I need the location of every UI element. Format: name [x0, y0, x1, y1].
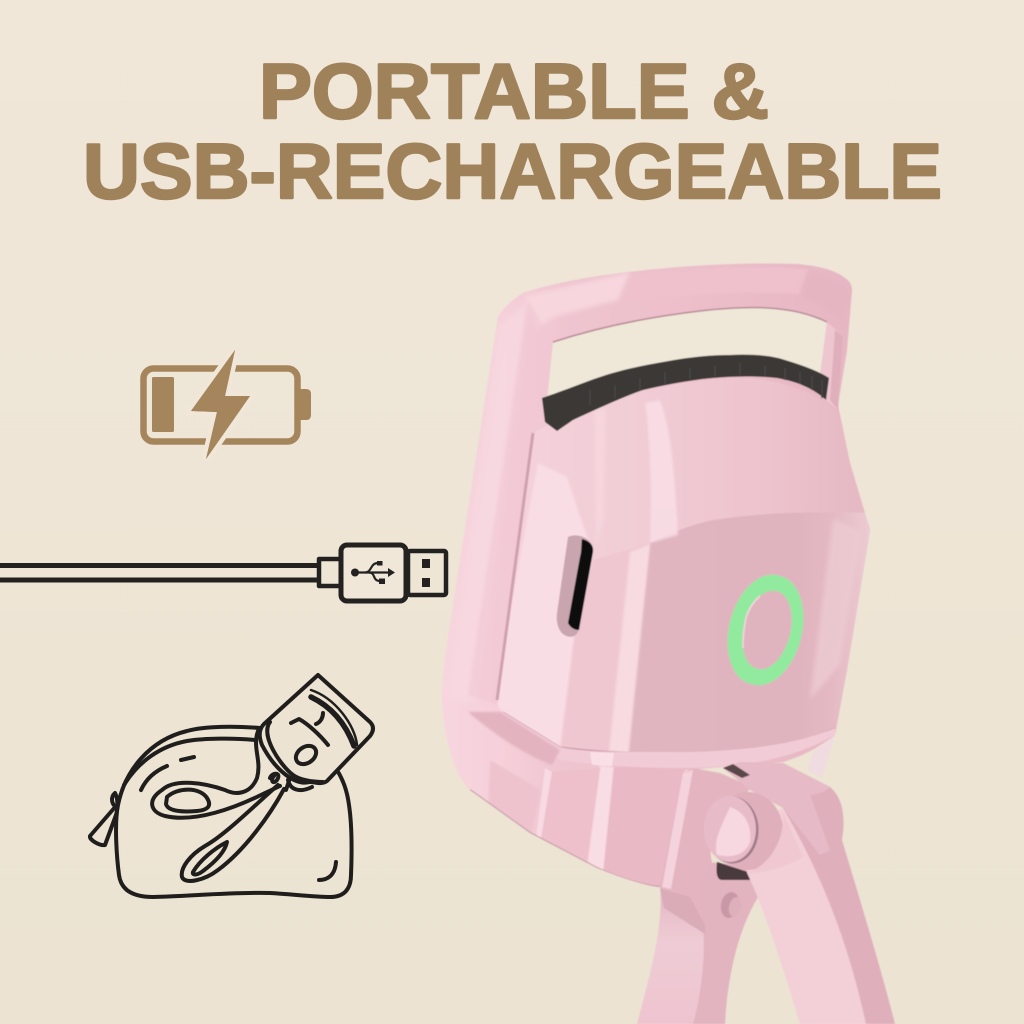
- body left groove: [497, 433, 533, 700]
- curler upper handle: [182, 785, 284, 881]
- bag zipper line: [124, 739, 255, 785]
- zipper pull: [90, 793, 117, 845]
- body right reflection: [812, 521, 846, 694]
- base rim: [468, 712, 835, 768]
- title: [83, 47, 942, 215]
- lash pad ribs: [590, 363, 822, 405]
- pivot collar: [713, 792, 783, 870]
- product: pink eyelash curler: [442, 263, 895, 1024]
- icon: USB trident symbol: [351, 561, 395, 584]
- title: PORTABLE &: [259, 47, 769, 135]
- frame inner left band: [470, 310, 540, 696]
- curler head: [260, 675, 373, 783]
- icon: cosmetic bag with eyelash curler: [90, 675, 373, 897]
- bottom edge shadow: [470, 790, 660, 887]
- curler window: [547, 308, 827, 400]
- right pillar: [818, 322, 843, 410]
- icon: USB cable: [0, 545, 446, 601]
- hinge gap: [717, 862, 757, 880]
- frame top highlights: [528, 273, 628, 323]
- hinge screw hole: [718, 890, 742, 920]
- left body panel: [498, 465, 588, 746]
- dome highlights: [645, 400, 678, 543]
- left leg darker right face: [693, 862, 758, 1024]
- curler body: [498, 378, 870, 752]
- body highlight band: [609, 544, 650, 752]
- title: USB-RECHARGEABLE: [83, 127, 942, 215]
- pale inner behind arm: [808, 735, 835, 778]
- left leg: [637, 860, 758, 1024]
- pivot button: [704, 796, 756, 862]
- frame outer shell: [442, 263, 870, 887]
- hinge arm: [660, 735, 835, 925]
- base bands: [488, 762, 528, 828]
- mid body band: [562, 591, 585, 746]
- frame left highlight: [503, 310, 524, 446]
- right arm dark face: [783, 763, 895, 1024]
- left leg inner shadow: [660, 888, 705, 934]
- right arm light face: [740, 808, 866, 1024]
- hinge arm light edge: [662, 770, 693, 889]
- lower body panel: [629, 513, 870, 752]
- icon: battery charging: [144, 350, 311, 459]
- black lash pad: [542, 355, 829, 431]
- curler lower handle: [152, 731, 280, 818]
- bag outline: [116, 727, 352, 897]
- green LED ring: [728, 575, 803, 685]
- right arm top plate: [723, 762, 830, 855]
- charging port slot: [557, 535, 593, 637]
- body bottom seam: [503, 712, 835, 753]
- bag highlights: [141, 757, 336, 880]
